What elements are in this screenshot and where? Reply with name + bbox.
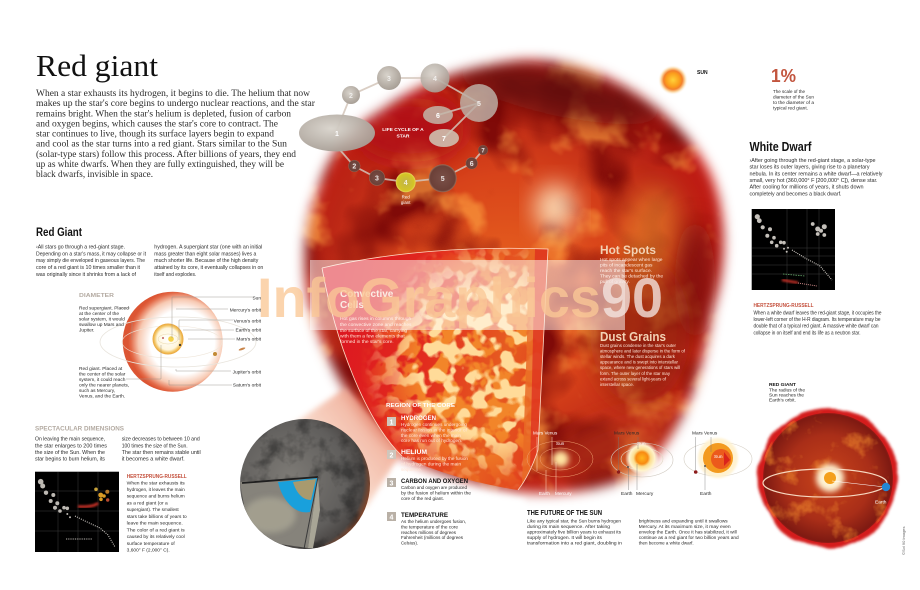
region number 1: 1 [390, 419, 394, 426]
region number 3: 3 [390, 480, 394, 487]
spectacular dimensions: On leaving the main sequence, [35, 437, 105, 443]
red giant note: the center of the solar [79, 372, 126, 378]
stage numbers: 3 [387, 76, 391, 83]
stage numbers: 4 [433, 76, 437, 83]
hot spots text: Hot Spots [600, 243, 656, 257]
dust grains text [600, 330, 686, 388]
small red giant with earth orbit: Earth [875, 500, 887, 506]
red giant note: system, it could reach [79, 377, 126, 383]
spectacular dimensions: 100 times the size of the Sun. [122, 444, 188, 450]
red supergiant note: solar system, it would [79, 316, 125, 322]
orbit labels [230, 296, 262, 388]
future of the sun text: during its main sequence. After taking [527, 524, 610, 530]
hertzsprung-russell text: red giant: as a red giant (or a [127, 500, 168, 506]
spectacular dimensions: the star enlarges to 200 times [35, 444, 107, 450]
life cycle label [382, 127, 424, 140]
orbit labels: Saturn's orbit [233, 382, 262, 388]
hertzsprung-russell text: white dwarf: lower-left corner of the H-R diagram. Its temperature may be [754, 317, 880, 323]
carbon and oxygen: Carbon and oxygen are produced [401, 485, 467, 491]
white dwarf text: star loses its outer layers, giving rise to a planetary [750, 165, 870, 171]
convective cells text: Convective [340, 289, 394, 300]
convective cells text: Cells [340, 300, 364, 311]
hot spots text: reach the star's surface. [600, 268, 652, 274]
stage numbers [335, 76, 485, 187]
dust grains text: Dust grains condense in the star's outer [600, 343, 676, 349]
title: Red giant [36, 48, 158, 83]
red giant note on right [769, 382, 805, 404]
hydrogen: Hydrogen continues undergoing [401, 422, 467, 428]
stage three: Earth [700, 491, 712, 497]
stage numbers: 2 [349, 93, 353, 100]
orbit labels: Sun [252, 296, 261, 302]
carbon and oxygen: core of the red giant. [401, 496, 444, 502]
red giant stage label [401, 194, 411, 205]
life cycle of a star [299, 64, 498, 205]
red supergiant note: Red supergiant. Placed [79, 306, 129, 312]
temperature: reaches millions of degrees [401, 530, 457, 536]
convective cells text: Hot gas rises in columns through [340, 316, 411, 322]
one percent caption: to the diameter of a [773, 100, 814, 106]
dust grains text: extend across several light-years of [600, 376, 667, 382]
helium: sequence. [401, 468, 422, 473]
stage one on star: Mercury [555, 491, 572, 496]
intro text: (solar-type stars) follow this process. After billions of years, they end [36, 149, 296, 160]
stage 2 [342, 86, 360, 104]
stage 3 [377, 66, 401, 90]
helium [401, 449, 468, 473]
red giant note on right: Earth's orbit. [769, 398, 796, 404]
orbit labels: Mars's orbit [236, 336, 262, 342]
red giant sphere [123, 292, 223, 392]
orbit labels: Mercury's orbit [230, 308, 262, 314]
lower stage 2 [348, 160, 360, 172]
white dwarf text: After cooling for millions of years, it shuts down [750, 185, 864, 191]
one percent caption: The scale of the [773, 89, 805, 95]
one percent caption [773, 89, 814, 112]
hertzsprung-russell text: red giant: 3,600° F (2,000° C). [127, 548, 170, 554]
red giant note [79, 366, 129, 400]
future of the sun text: envelop the Earth. Once it has stabilized, it will [639, 530, 737, 536]
future of the sun text: brightness and expanding until it swallows [639, 518, 728, 524]
diameter diagram: DIAMETER [79, 293, 115, 299]
red giant column 1: Depending on a star's mass, it may collapse or it [36, 252, 146, 258]
planets [162, 337, 246, 356]
future of the sun text [527, 510, 739, 546]
red giant note: Red giant. Placed at [79, 366, 123, 372]
region number 4: 4 [390, 514, 394, 521]
hot spots text [600, 243, 663, 285]
future of the sun text: continue as a red giant for two billion years and [639, 535, 739, 541]
sun icon [658, 65, 688, 95]
stage 4 [420, 64, 450, 92]
intro text: star continues to live, though its surface layers begin to expand [36, 128, 274, 140]
red giant column 2: attained by its core, it eventually collapses in on [154, 265, 263, 271]
dust grains text: atmosphere and later disperse in the form of [600, 349, 686, 355]
earth [882, 483, 890, 491]
red supergiant note: at the center of the [79, 311, 119, 317]
orbit labels: Earth's orbit [236, 328, 262, 334]
dust grains text: stellar winds. The dust acquires a dark [600, 354, 675, 360]
future of the sun text: approximately five billion years to exhaust its [527, 530, 622, 536]
future of the sun text: Like any typical star, the Sun burns hydrogen [527, 518, 621, 524]
spectacular dimensions [35, 426, 201, 463]
hot spots text: They can be detached by the [600, 274, 663, 280]
hertzsprung-russell chart: red giant [35, 472, 119, 552]
hertzsprung-russell text: red giant [127, 474, 187, 554]
spectacular dimensions: the size of the Sun. When the [35, 450, 105, 456]
carbon and oxygen [401, 478, 471, 502]
stage 7 [429, 129, 459, 147]
future of the sun text: THE FUTURE OF THE SUN [527, 510, 602, 517]
red giant stage label: Red [402, 194, 410, 200]
hertzsprung-russell text: red giant: supergiant). The smallest [127, 507, 179, 513]
hertzsprung-russell text: red giant: HERTZSPRUNG-RUSSELL [127, 474, 187, 480]
intro text: and oxygen begins, which causes the star's core to contract. The [36, 118, 279, 129]
red giant column 1: ›All stars go through a red-giant stage. [36, 245, 125, 251]
lower stage 4 red giant [396, 172, 416, 192]
stage numbers: 7 [481, 148, 485, 154]
temperature: Fahrenheit (millions of degrees [401, 535, 464, 541]
convective cells text: formed in the star's core. [340, 339, 394, 345]
orbit labels: Jupiter's orbit [233, 370, 262, 376]
dust grains text: space, where new generations of stars will [600, 365, 680, 371]
red giant note on right: RED GIANT [769, 382, 796, 388]
one percent stat: 1% [771, 66, 796, 86]
stage one on star: Sun [556, 441, 565, 446]
watermark text: InfoGraphics90 [257, 266, 663, 329]
spectacular dimensions: SPECTACULAR DIMENSIONS [35, 426, 124, 433]
cross-section wedge of the star core [322, 248, 548, 490]
stage three [684, 430, 752, 497]
stage 5 [460, 84, 498, 122]
hydrogen [401, 415, 468, 444]
future of the sun stage diagrams [527, 430, 752, 497]
stage one on star: Mars Venus [533, 430, 558, 436]
hertzsprung-russell text: white dwarf: HERTZSPRUNG-RUSSELL [754, 303, 814, 309]
stage 6 [423, 106, 453, 124]
region of the core [386, 403, 471, 547]
convective cells text [340, 289, 412, 345]
sun [168, 336, 174, 342]
outer orbits [100, 317, 256, 367]
spectacular dimensions: The star then remains stable until [122, 450, 201, 456]
stage two: Mercury [636, 491, 654, 497]
watermark band [310, 260, 625, 330]
stage 1 [299, 114, 375, 152]
red giant column 2: itself and explodes. [154, 272, 196, 278]
convective cells text: the convective zone and reaches [340, 322, 412, 328]
diameter diagram [79, 292, 262, 400]
helium: of hydrogen during the main [401, 462, 461, 468]
orbit labels: Venus's orbit [234, 318, 262, 324]
red giant column 1: core of a red giant is 10 times smaller than it [36, 265, 140, 271]
hertzsprung-russell chart: white dwarf [752, 209, 835, 290]
stage two [611, 430, 673, 497]
white dwarf text: small, very hot (360,000° F [200,000° C]), dense star. [750, 178, 878, 184]
hot spots text: Hot spots appear when large [600, 257, 663, 263]
helium: Helium is produced by the fusion [401, 456, 468, 462]
white dwarf text: nebula. In its center remains a white dwarf—a relatively [750, 171, 883, 177]
red giant section heading: Red Giant [36, 225, 82, 239]
life cycle label: STAR [397, 134, 410, 140]
temperature: Celsius). [401, 541, 418, 547]
big red giant star [294, 50, 734, 504]
stage numbers: 1 [335, 131, 339, 138]
intro text: remains bright. When the star's helium is depleted, fusion of carbon [36, 108, 291, 119]
carbon and oxygen: by the fusion of helium within the [401, 490, 471, 496]
red giant note on right: The radius of the [769, 388, 805, 394]
region number 2 [387, 450, 396, 459]
hertzsprung-russell text: red giant: stars take billions of years to [127, 514, 187, 520]
stage numbers: 7 [442, 136, 446, 143]
hertzsprung-russell text: red giant: caused by its relatively cool [127, 534, 185, 540]
hertzsprung-russell text: white dwarf: double that of a typical red giant. A massive white dwarf can [754, 324, 878, 330]
region number 4 [387, 512, 396, 521]
region number 1 [387, 417, 396, 426]
red giant note: Venus, and the Earth. [79, 394, 125, 400]
temperature: TEMPERATURE [401, 512, 448, 519]
peach projection cone to the core sample [292, 388, 402, 508]
helium: HELIUM [401, 449, 427, 456]
red supergiant note: Jupiter. [79, 328, 94, 334]
stage numbers: 3 [375, 176, 379, 182]
hertzsprung-russell text: white dwarf [754, 303, 882, 336]
red giant column 1: was originally since it shrinks from a lack of [35, 272, 136, 278]
lower stage 7 [478, 145, 488, 155]
hertzsprung-russell text: red giant: leave the main sequence. [127, 521, 183, 527]
hydrogen: the core even when the main [401, 433, 461, 439]
intro text: When a star exhausts its hydrogen, it begins to die. The helium that now [36, 88, 311, 99]
hertzsprung-russell text: white dwarf: When a white dwarf leaves the red-giant stage, it occupies the [754, 310, 882, 316]
spectacular dimensions: size decreases to between 10 and [122, 437, 200, 443]
dust grains text: appearance and is swept into interstellar [600, 360, 678, 366]
convective cells text: the surface of the star, carrying [340, 328, 407, 334]
image credit: ©Sol 90 Images [901, 526, 906, 555]
red giant column 2 [154, 245, 263, 278]
stage numbers: 4 [404, 180, 408, 187]
red giant note: only the nearer planets, [79, 382, 129, 388]
hertzsprung-russell text: red giant: When the star exhausts its [127, 480, 185, 486]
future of the sun text: supply of hydrogen. It will begin its [527, 535, 603, 541]
hertzsprung-russell text: white dwarf: collapse in on itself and end its life as a neutron star. [754, 330, 860, 336]
stage one on star [527, 430, 593, 496]
intro text [36, 88, 316, 180]
red giant column 2: hydrogen. A supergiant star (one with an initial [154, 245, 262, 251]
region number 2: 2 [390, 452, 394, 459]
red giant column 1 [35, 245, 146, 278]
leader lines [120, 297, 253, 385]
lower stage 6 [466, 157, 478, 169]
red giant note on right: Sun reaches the [769, 392, 804, 398]
temperature: As the helium undergoes fusion, [401, 519, 466, 525]
intro text: and cool as the star turns into a red giant. Stars similar to the Sun [36, 139, 287, 150]
inner stage [152, 324, 184, 354]
lower stage 5 [429, 164, 457, 192]
intro text: up as white dwarfs. When they are fully extinguished, they will be [36, 159, 285, 170]
stage one on star: Earth [539, 491, 550, 496]
white dwarf text: ›After going through the red-giant stage, a solar-type [750, 158, 876, 164]
intro text: makes up the star's core begins to undergo nuclear reactions, and the star [36, 98, 316, 109]
stage numbers: 2 [352, 164, 356, 170]
white dwarf text [750, 158, 883, 197]
white fade below wedge [395, 468, 525, 514]
hot spots text: pull of gravity. [600, 279, 630, 285]
stage two: Sun [637, 441, 646, 447]
future of the sun text: Mercury. At its maximum size, it may even [639, 524, 731, 530]
carbon and oxygen: CARBON AND OXYGEN [401, 478, 468, 485]
dust grains text: interstellar space. [600, 382, 634, 388]
small red giant with earth orbit [755, 405, 901, 551]
hertzsprung-russell text: red giant: sequence and burns helium [127, 494, 185, 500]
white dwarf text: completely and becomes a black dwarf. [750, 191, 842, 197]
intro text: black dwarfs, invisible in space. [36, 169, 153, 180]
red giant note: such as Mercury, [79, 388, 115, 394]
stage numbers: 6 [470, 161, 474, 168]
hertzsprung-russell text: red giant: surface temperature of [127, 541, 175, 547]
stage three: Mars Venus [692, 430, 718, 436]
sun label: SUN [697, 70, 708, 76]
dust grains text: form. The outer layer of the star may [600, 371, 670, 377]
future of the sun text: transformation into a red giant, doubling in [527, 540, 622, 546]
one percent caption: typical red giant. [773, 106, 808, 112]
red giant stage label: giant [401, 200, 411, 205]
stage two: Mars Venus [614, 430, 640, 436]
lower stage 3 [369, 170, 385, 186]
spectacular dimensions: star begins to burn helium, its [35, 457, 105, 463]
future of the sun text: then become a white dwarf. [639, 540, 694, 546]
life cycle label: LIFE CYCLE OF A [382, 127, 424, 133]
stage three: Sun [714, 454, 723, 460]
red giant column 2: much shorter life. Because of the high density [154, 258, 259, 264]
red giant column 1: may simply die enveloped in gaseous layers. The [36, 258, 145, 264]
red supergiant note [79, 306, 129, 334]
region of the core: REGION OF THE CORE [386, 403, 455, 409]
grey core sample sphere [238, 416, 372, 550]
hertzsprung-russell text: red giant: hydrogen, it leaves the main [127, 487, 185, 493]
stage numbers: 5 [441, 176, 445, 183]
dust grains text: Dust Grains [600, 330, 666, 344]
stage two: Earth [621, 491, 633, 497]
hot spots text: pits of incandescent gas [600, 262, 653, 268]
hydrogen: HYDROGEN [401, 415, 436, 422]
red giant column 2: mass greater than eight solar masses) lives a [154, 252, 256, 258]
hydrogen: nuclear fission in the interior of [401, 427, 468, 433]
hydrogen: core has run out of hydrogen. [401, 438, 462, 444]
stage numbers: 6 [436, 113, 440, 120]
region number 3 [387, 478, 396, 487]
red supergiant note: swallow up Mars and [79, 322, 124, 328]
white dwarf heading: White Dwarf [750, 140, 812, 154]
temperature [401, 512, 466, 547]
stage numbers: 5 [477, 101, 481, 108]
spectacular dimensions: it becomes a white dwarf. [122, 457, 185, 463]
temperature: the temperature of the core [401, 524, 458, 530]
one percent caption: diameter of the Sun [773, 94, 814, 100]
hertzsprung-russell text: red giant: The color of a red giant is [127, 528, 185, 534]
convective cells text: with them a few elements that [340, 334, 405, 340]
